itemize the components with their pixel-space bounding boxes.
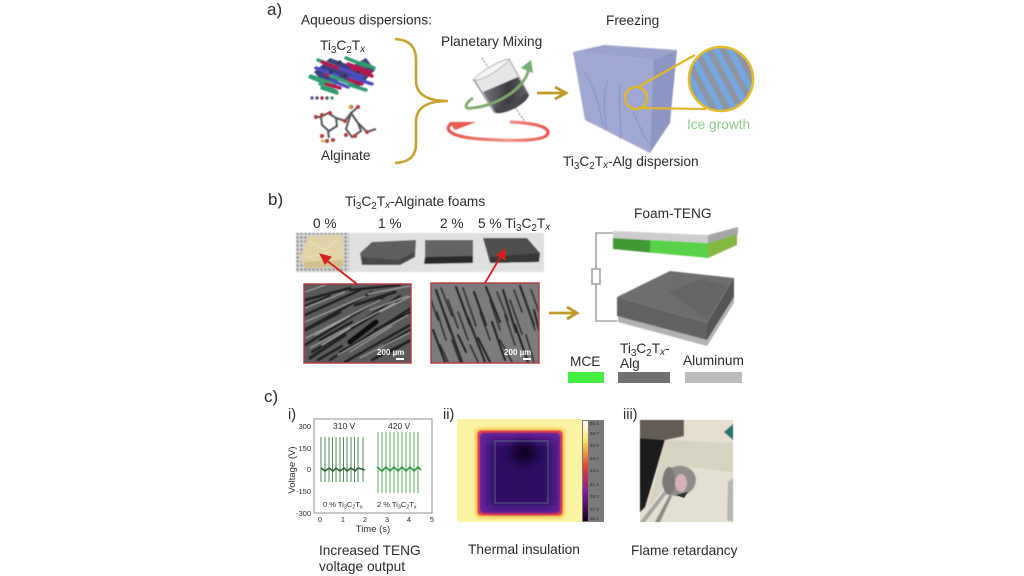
series labels: 3 (344, 504, 347, 510)
illustration: frozen cube (573, 45, 677, 153)
series: 2 % (378, 432, 418, 493)
icon: planetary mixer (448, 58, 548, 140)
figure (264, 3, 754, 574)
color scale: 45.0 (590, 456, 599, 461)
heading: foams: 3 (356, 201, 362, 212)
scale bar: 200 µm (504, 348, 531, 357)
percentage labels: T (537, 216, 546, 231)
illustration: MCE top electrode (613, 227, 738, 258)
heading: foams: x (384, 200, 391, 211)
icon: MXene structure (310, 58, 375, 100)
chart: voltage vs time: x (414, 504, 417, 510)
color scale: 50.1 (590, 421, 599, 426)
label: dispersion: C (579, 154, 589, 169)
percentage labels (313, 216, 551, 234)
label: Ti3C2Tx: Ti (320, 38, 331, 53)
series: 0 % (321, 437, 363, 482)
color scale: 43.1 (590, 468, 599, 473)
photo: flame test (640, 420, 733, 522)
label: dispersion: T (595, 154, 604, 169)
series labels: 2 (352, 504, 355, 510)
arrow: SEM to TENG (549, 307, 577, 319)
panel: c) properties (264, 387, 738, 574)
chart: voltage vs time: 3 (385, 515, 389, 524)
color scale: 41.2 (590, 482, 599, 487)
legend: foam: 3 (631, 348, 637, 359)
axis ticks: 0 (307, 465, 311, 474)
label a): a) (267, 0, 282, 19)
y axis title: Voltage (V) (287, 446, 298, 494)
chart: voltage vs time: 2 (363, 515, 367, 524)
axis ticks: 150 (298, 444, 311, 453)
label: dispersion: 3 (574, 161, 580, 172)
chart: voltage vs time: 3 (398, 504, 401, 510)
label c): c) (264, 387, 278, 406)
label ii): ii) (443, 407, 454, 423)
chart: voltage vs time: 420 V (388, 421, 411, 431)
chart: voltage vs time: T (409, 500, 414, 509)
label: dispersion: Ti (563, 154, 574, 169)
label: Ti3C2Tx: 2 (346, 45, 352, 56)
color scale: 48.7 (590, 431, 599, 436)
label iii): iii) (623, 407, 638, 423)
label: Ti3C2Tx: 3 (331, 45, 337, 56)
chart: voltage vs time (287, 419, 434, 535)
legend: aluminum: Aluminum (683, 353, 744, 368)
color scale: 46.9 (590, 443, 599, 448)
heading: foams: T (377, 194, 386, 209)
arrows: photo to SEM (320, 249, 505, 284)
label: planetary mixing: Planetary Mixing (441, 34, 542, 49)
legend: foam: Ti (620, 341, 631, 356)
legend: MCE: MCE (570, 354, 600, 369)
heading: foams: Ti (345, 194, 356, 209)
label: alginate: Alginate (321, 148, 370, 163)
color scale: 39.2 (590, 494, 599, 499)
percentage labels: 3 (516, 223, 522, 234)
percentage labels: 2 (531, 223, 537, 234)
percentage labels: 5 % Ti (478, 216, 516, 231)
label: Ti3C2Tx: x (359, 44, 366, 55)
axis ticks: 300 (298, 422, 311, 431)
sample (659, 462, 699, 500)
illustration: foam block (617, 271, 734, 346)
arrow: mixer to cube (537, 87, 566, 99)
thermal image (457, 419, 604, 522)
chart: voltage vs time: 2 % Ti (377, 500, 398, 509)
chart: voltage vs time: 5 (430, 515, 434, 524)
photo: foam samples (296, 233, 544, 272)
series labels: C (347, 500, 353, 509)
label: freezing: Freezing (606, 13, 659, 28)
chart: voltage vs time: 0 (318, 515, 322, 524)
caption: TENG voltage: Increased TENG (319, 543, 421, 558)
axis ticks (296, 422, 311, 518)
circuit (592, 233, 617, 321)
chart: voltage vs time: 4 (407, 515, 411, 524)
legend: foam: Alg (620, 356, 640, 371)
caption: TENG voltage: voltage output (319, 559, 405, 574)
percentage labels: 1 % (378, 216, 402, 231)
percentage labels: 0 % (313, 216, 337, 231)
panel: a) fabrication (267, 0, 753, 172)
label: ice growth: Ice growth (687, 117, 750, 132)
legend: foam (618, 341, 670, 383)
callout: zoomed ice (625, 47, 753, 111)
legend: foam: x (659, 347, 666, 358)
label: Foam-TENG: Foam-TENG (634, 206, 712, 221)
color scale: 36.1 (590, 516, 599, 521)
x axis title: Time (s) (356, 524, 390, 535)
label: Ti3C2Tx: C (336, 38, 346, 53)
legend: aluminum (683, 353, 744, 383)
color scale (582, 420, 604, 522)
percentage labels: x (544, 222, 551, 233)
scale bar: 200 µm (377, 348, 404, 357)
axis ticks: -150 (296, 487, 311, 496)
legend: foam: - (665, 341, 670, 356)
label: dispersion: x (602, 160, 609, 171)
caption: flame: Flame retardancy (631, 543, 738, 558)
series labels: 0 % Ti (323, 500, 344, 509)
series labels: x (360, 504, 363, 510)
chart: voltage vs time: C (401, 500, 407, 509)
legend: foam: 2 (646, 348, 652, 359)
heading: aqueous dispersions: Aqueous dispersions: (301, 12, 432, 28)
heading: foams: C (361, 194, 371, 209)
heading: foams: 2 (371, 201, 377, 212)
label i): i) (288, 407, 296, 423)
icon: curly brace (395, 39, 448, 163)
series labels: T (355, 500, 360, 509)
color scale: 37.2 (590, 507, 599, 512)
icon: alginate molecule (314, 105, 376, 143)
label b): b) (268, 190, 283, 209)
percentage labels: C (522, 216, 532, 231)
legend: materials (568, 341, 744, 383)
value labels: 310 V (333, 421, 356, 431)
chart: voltage vs time: 2 (406, 504, 409, 510)
legend: foam: C (636, 341, 646, 356)
label: dispersion: -Alg dispersion (608, 154, 699, 169)
label: Ti3C2Tx: T (352, 38, 361, 53)
heading: foams: -Alginate foams (390, 194, 485, 209)
legend: MCE (568, 354, 604, 383)
SEM image: 0 % (304, 284, 411, 363)
legend: foam: T (652, 341, 661, 356)
chart: voltage vs time: 1 (341, 515, 345, 524)
caption: thermal: Thermal insulation (468, 542, 580, 557)
axis ticks: -300 (296, 509, 311, 518)
percentage labels: 2 % (440, 216, 464, 231)
panel: b) foams (268, 190, 744, 383)
SEM image: 5 % (431, 283, 539, 363)
label: dispersion: 2 (589, 161, 595, 172)
